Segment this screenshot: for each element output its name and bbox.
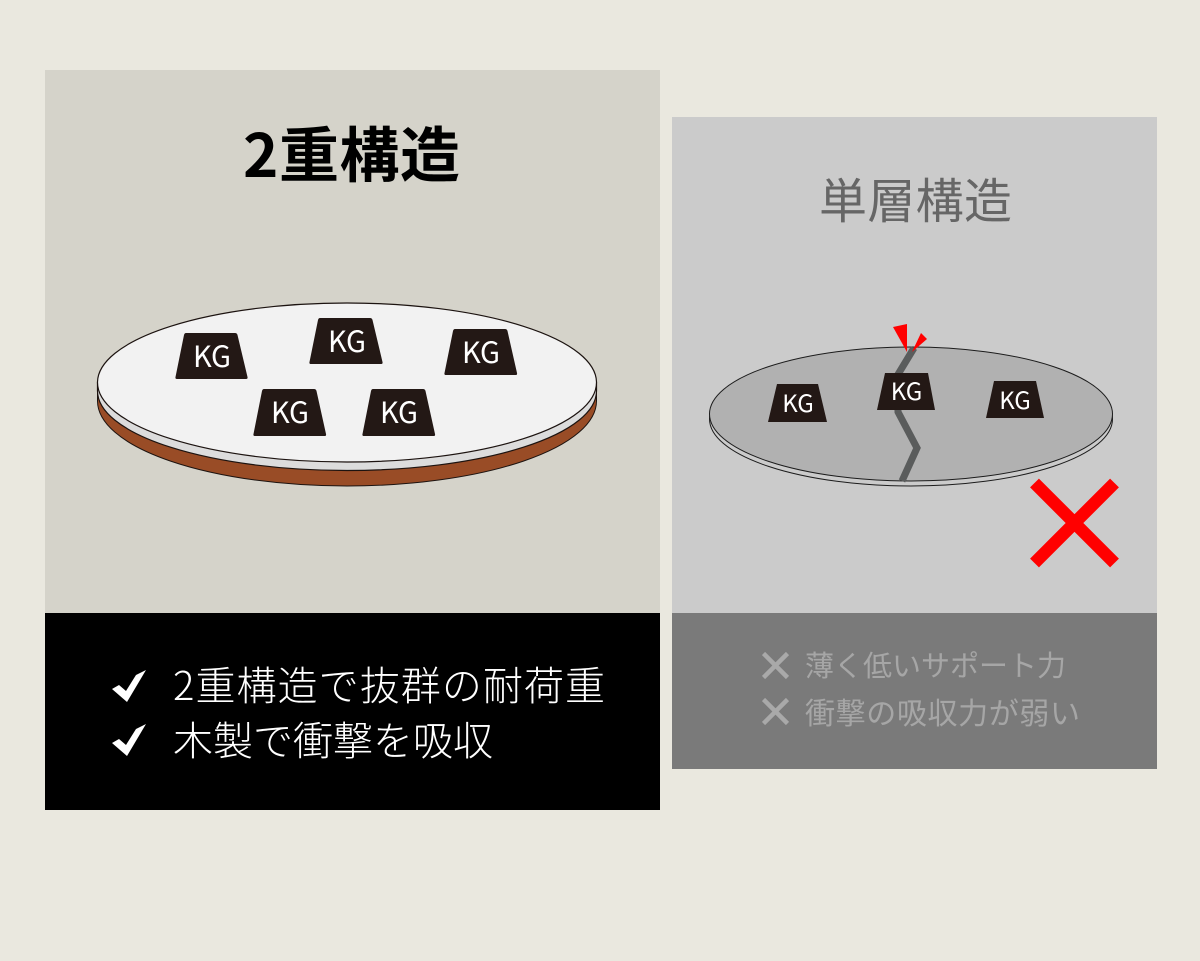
panel: double structure benefits bbox=[45, 613, 660, 810]
heading: single layer: 単層構造 bbox=[819, 162, 1012, 232]
icon: cross 2 bbox=[764, 700, 788, 724]
weight 2: KG bbox=[328, 319, 366, 361]
weight 1: KG bbox=[193, 334, 231, 376]
weight 4 bbox=[253, 389, 326, 436]
icon: red crack marks bbox=[893, 324, 927, 352]
drawback 1: 薄く低いサポート力 bbox=[805, 643, 1066, 685]
illustration: double-layer disc with weights bbox=[98, 303, 596, 486]
weight 1 bbox=[175, 333, 248, 379]
icon: check 2 bbox=[112, 724, 146, 756]
heading: double structure: 2重構造 bbox=[243, 108, 460, 195]
benefit 2: 木製で衝撃を吸収 bbox=[173, 709, 493, 767]
illustration: cracked single-layer disc bbox=[710, 324, 1112, 486]
weight 5 bbox=[362, 389, 435, 436]
benefit 1: 2重構造で抜群の耐荷重 bbox=[173, 654, 605, 712]
weight left bbox=[768, 384, 827, 422]
panel: single layer drawbacks bbox=[672, 613, 1157, 769]
weight centre: KG bbox=[891, 372, 922, 407]
drawback 2: 衝撃の吸収力が弱い bbox=[805, 689, 1080, 733]
weight 5: KG bbox=[380, 390, 418, 432]
icon: cross 1 bbox=[764, 654, 788, 678]
weight centre bbox=[877, 372, 935, 410]
crack bbox=[897, 348, 917, 481]
weight 3: KG bbox=[462, 330, 500, 372]
weight 3 bbox=[444, 329, 517, 375]
weight 4: KG bbox=[271, 390, 309, 432]
panel: single layer bbox=[672, 117, 1157, 613]
weight 2 bbox=[309, 318, 383, 364]
weight right: KG bbox=[999, 381, 1031, 416]
weight left: KG bbox=[782, 384, 814, 419]
weight right bbox=[986, 381, 1044, 418]
icon: red cross bbox=[1034, 483, 1114, 563]
panel: double structure bbox=[45, 70, 660, 613]
icon: check 1 bbox=[112, 670, 146, 702]
